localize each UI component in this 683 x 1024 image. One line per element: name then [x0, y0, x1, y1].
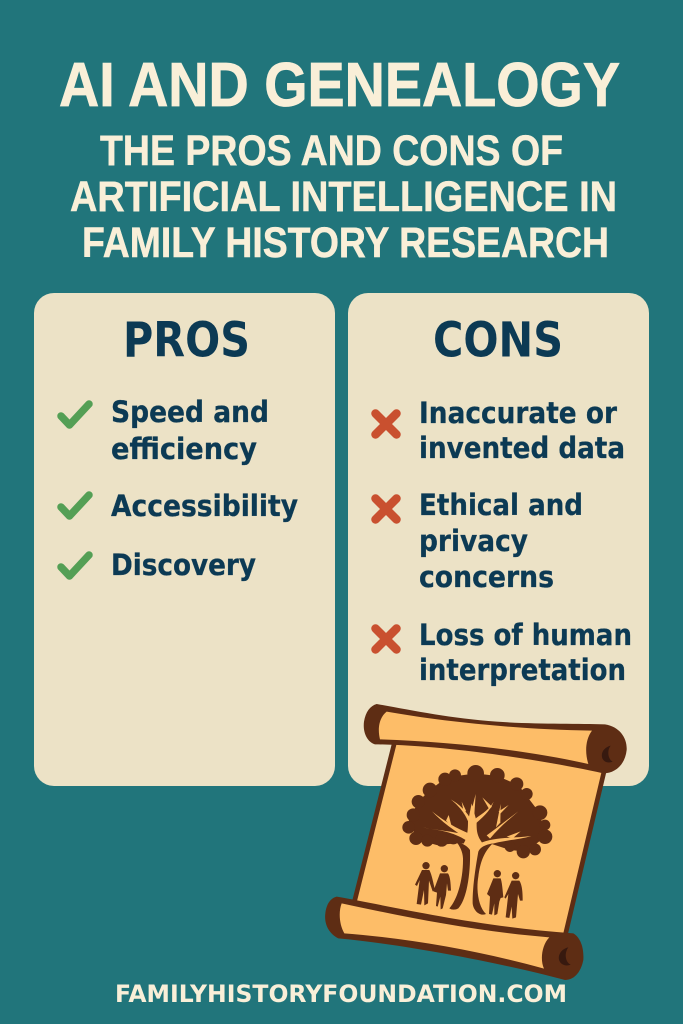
panel: pros — [34, 293, 335, 786]
con item: inaccurate data — [376, 396, 625, 465]
pro item: discovery — [61, 548, 256, 582]
figure 3 — [487, 870, 503, 915]
subtitle — [70, 128, 617, 267]
con item: loss of human interpretation — [376, 618, 632, 687]
figure 2 — [433, 865, 451, 909]
pro item: speed and efficiency — [61, 395, 269, 466]
title: AI AND GENEALOGY — [59, 51, 620, 120]
tree trunk — [449, 842, 493, 915]
con item: loss of human interpretation: interpretation — [419, 653, 626, 687]
pro item: speed and efficiency: efficiency — [111, 432, 257, 466]
bottom roller — [325, 897, 583, 980]
family figures — [415, 862, 523, 919]
icon: scroll with family tree — [325, 704, 627, 980]
con item: ethical and privacy: Ethical and — [419, 488, 583, 522]
figure 1 — [415, 862, 435, 905]
con item: ethical and privacy: privacy — [419, 524, 528, 558]
con item: inaccurate data: invented data — [419, 431, 625, 465]
top roller — [364, 704, 627, 773]
title — [59, 51, 620, 267]
con item: inaccurate data: Inaccurate or — [419, 396, 618, 430]
pros heading: PROS — [123, 312, 250, 368]
con item: loss of human interpretation: Loss of human — [419, 618, 632, 652]
pro item: speed and efficiency: Speed and — [111, 395, 269, 429]
pro item: accessibility: Accessibility — [111, 489, 298, 523]
con item: ethical and privacy: concerns — [419, 560, 554, 594]
tree canopy — [402, 765, 552, 858]
figure 4 — [504, 872, 523, 919]
scroll page — [352, 737, 606, 943]
tree branches — [423, 794, 531, 848]
subtitle: ARTIFICIAL INTELLIGENCE IN — [70, 174, 617, 221]
subtitle: THE PROS AND CONS OF — [100, 128, 563, 175]
cons heading: CONS — [433, 312, 563, 368]
pro item: discovery: Discovery — [111, 548, 256, 582]
panel: cons — [348, 293, 649, 786]
subtitle: FAMILY HISTORY RESEARCH — [82, 220, 609, 267]
con item: ethical and privacy — [376, 488, 583, 594]
footer url: FAMILYHISTORYFOUNDATION.COM — [115, 980, 567, 1008]
